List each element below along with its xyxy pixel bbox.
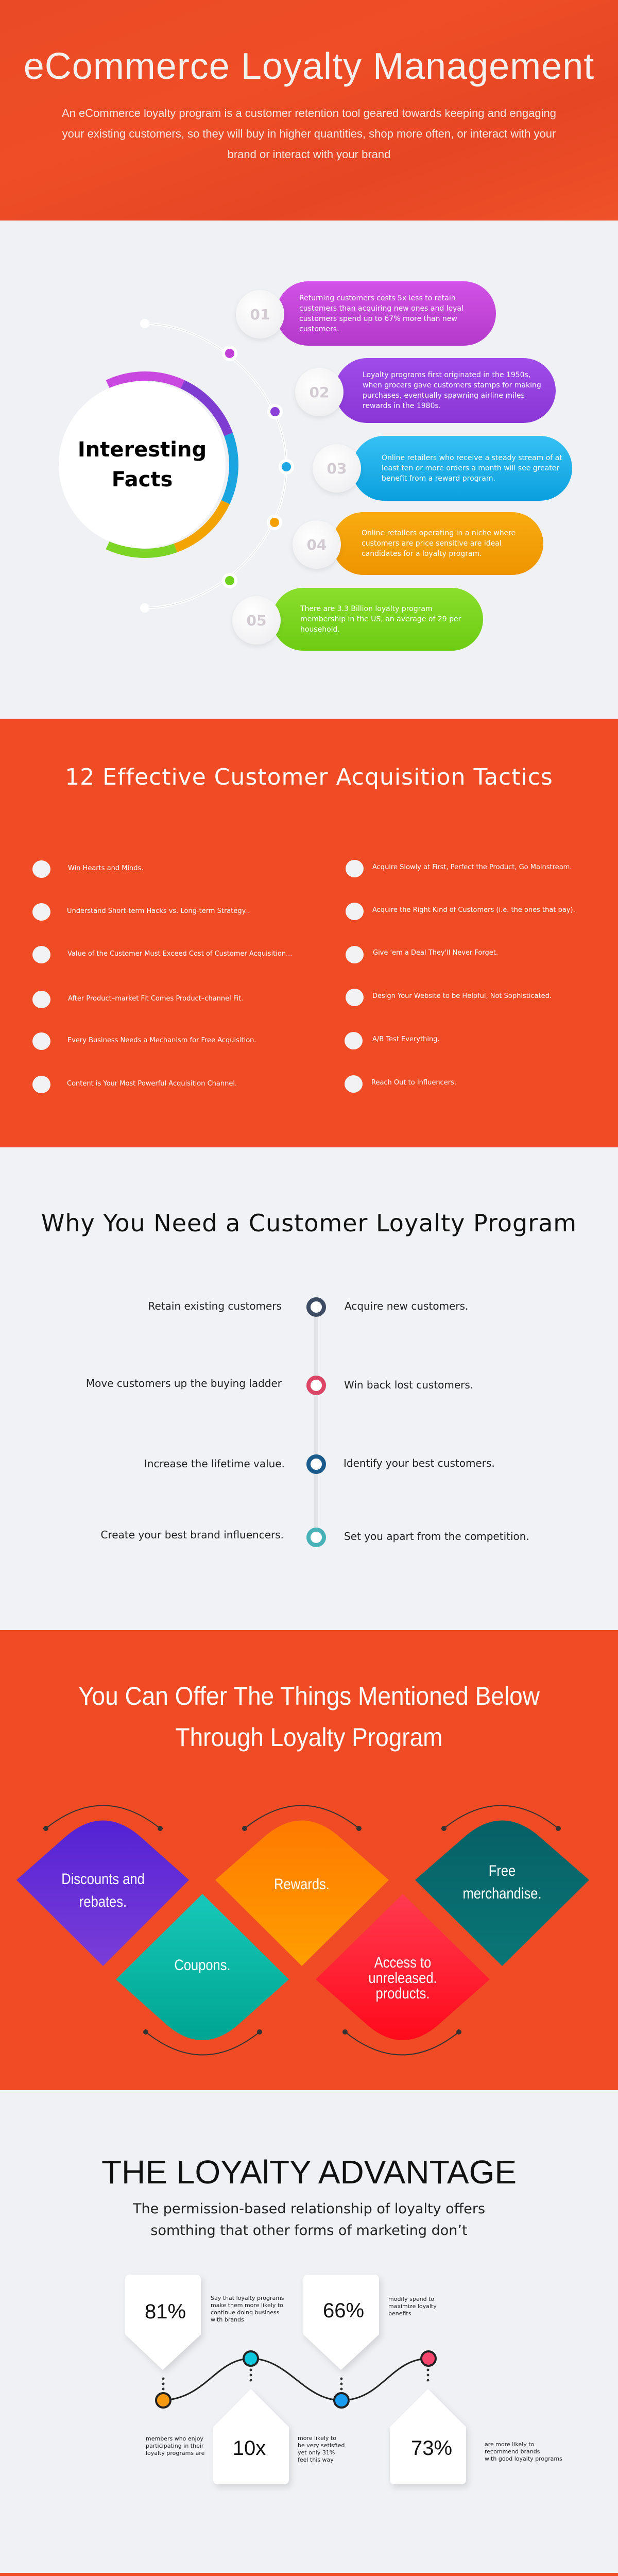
center heading: interesting facts: Facts [112,468,173,492]
timeline: Identify your best customers. [344,1457,495,1469]
stat text: 73% [485,2441,562,2462]
stat text: 81%: continue doing business [211,2309,279,2316]
stat text: 81%: make them more likely to [211,2302,283,2309]
offers heading [78,1682,540,1752]
fact 04: Online retailers operating in a niche where customers are price sensitive are ideal candidates for a loyalty program. [362,529,516,558]
stat text: 66%: maximize loyalty [388,2303,437,2310]
timeline: Increase the lifetime value. [144,1458,285,1470]
timeline: Retain existing customers [148,1300,282,1312]
number 04: 04 [307,536,327,553]
label: coupons: Coupons. [174,1957,231,1974]
fact 04 [332,512,543,575]
stat text: 81%: with brands [211,2316,244,2323]
offers heading: Through Loyalty Program [175,1723,443,1752]
stats chart: 10x [233,2437,266,2460]
number 01 [236,290,284,338]
stat text: 73%: are more likely to [485,2441,534,2448]
tactics list: Win Hearts and Minds. [68,865,143,872]
fact 01 [276,281,496,346]
tactics list: Every Business Needs a Mechanism for Free Acquisition. [67,1037,256,1044]
panel: loyalty advantage [0,2090,618,2573]
subtitle text: An eCommerce loyalty program is a customer retention tool geared towards keeping and engaging your existing customers, so they will buy in higher quantities, shop more often, or interact with your brand or interact with your brand [62,107,556,161]
label: discounts: Discounts and rebates. [61,1871,145,1910]
timeline: Acquire new customers. [345,1300,468,1312]
stat text: 10x left: participating in their [146,2443,203,2449]
stat text: 10x right: be very setisfied [298,2442,345,2449]
tactics list: Acquire Slowly at First, Perfect the Product, Go Mainstream. [372,863,572,871]
header banner [0,0,618,221]
stat text: 10x right [298,2435,345,2463]
panel: why loyalty program [0,1147,618,1630]
tactics list: Reach Out to Influencers. [371,1079,456,1087]
advantage subtitle [133,2201,485,2239]
stat text: 10x left: loyalty programs are [146,2450,204,2456]
tactics heading: 12 Effective Customer Acquisition Tactics [65,764,553,790]
stat text: 66%: modify spend to [388,2296,434,2302]
number 04 [293,520,341,569]
stat text: 10x right: more likely to [298,2435,336,2442]
panel: 12 tactics [0,719,618,1147]
advantage title: THE LOYAlTY ADVANTAGE [101,2154,517,2191]
tactics list: Value of the Customer Must Exceed Cost of Customer Acquisition... [67,950,292,958]
label: access to unreleased products: Access to unreleased. products. [368,1954,437,2002]
tactics list: Design Your Website to be Helpful, Not Sophisticated. [372,992,552,1000]
offer shapes [16,1805,589,2056]
number 02 [295,368,344,416]
number 03: 03 [327,460,347,477]
stat text: 10x left [146,2435,204,2456]
why heading: Why You Need a Customer Loyalty Program [41,1209,577,1237]
number 05: 05 [247,612,266,629]
offers heading: You Can Offer The Things Mentioned Below [78,1682,540,1710]
stats chart: 81% [145,2300,186,2323]
number 05 [232,596,281,645]
timeline [86,1297,529,1547]
tactics list: Understand Short-term Hacks vs. Long-term Strategy.. [67,907,249,915]
title: eCommerce Loyalty Management [24,46,594,87]
center heading: interesting facts [78,438,207,492]
tactics list: A/B Test Everything. [372,1036,440,1043]
tactics list: Content is Your Most Powerful Acquisition Channel. [67,1080,237,1088]
label: free merchandise: Free merchandise. [462,1862,542,1902]
timeline: Move customers up the buying ladder [86,1377,282,1389]
advantage subtitle: somthing that other forms of marketing don’t [150,2223,468,2239]
timeline: Win back lost customers. [344,1379,473,1391]
fact 03: Online retailers who receive a steady stream of at least ten or more orders a month will see greater benefit from a reward program. [382,454,562,483]
center heading: interesting facts: Interesting [78,438,207,462]
label: rewards: Rewards. [274,1876,330,1893]
stats chart [125,2275,470,2489]
panel: interesting facts [0,221,618,719]
tactics list [32,860,575,1093]
stat text: 66% [388,2296,437,2317]
stats chart: 66% [323,2299,364,2322]
fact 03 [352,436,572,501]
timeline: Create your best brand influencers. [101,1529,284,1541]
stats chart: 73% [411,2437,452,2460]
stat text: 73%: recommend brands [485,2448,540,2455]
stat text: 10x right: yet only 31% [298,2449,335,2456]
advantage subtitle: The permission-based relationship of loyalty offers [133,2201,485,2217]
fact 05 [272,588,483,651]
footer [0,2573,618,2576]
stat text: 66%: benefits [388,2310,411,2317]
number 01: 01 [250,306,270,323]
panel: offers [0,1630,618,2090]
fact 05: There are 3.3 Billion loyalty program membership in the US, an average of 29 per household. [300,605,461,634]
number 02: 02 [310,383,329,401]
tactics list: Give 'em a Deal They'll Never Forget. [373,949,498,957]
tactics list: After Product–market Fit Comes Product–channel Fit. [68,995,243,1003]
tactics list: Acquire the Right Kind of Customers (i.e. the ones that pay). [372,906,575,914]
stat text: 81% [211,2295,284,2323]
timeline: Set you apart from the competition. [344,1530,529,1543]
stat text: 10x left: members who enjoy [146,2435,203,2442]
number 03 [313,444,361,493]
stat text: 81%: Say that loyalty programs [211,2295,284,2301]
fact 02 [335,358,556,423]
fact 02: Loyalty programs first originated in the 1950s, when grocers gave customers stamps for making purchases, eventually spawning airline miles rewards in the 1980s. [363,371,541,410]
facts diagram [59,319,294,613]
stat text: 73%: with good loyalty programs [485,2455,562,2462]
fact 01: Returning customers costs 5x less to retain customers than acquiring new ones and loyal customers spend up to 67% more than new customers. [299,294,464,333]
stat text: 10x right: feel this way [298,2456,334,2463]
